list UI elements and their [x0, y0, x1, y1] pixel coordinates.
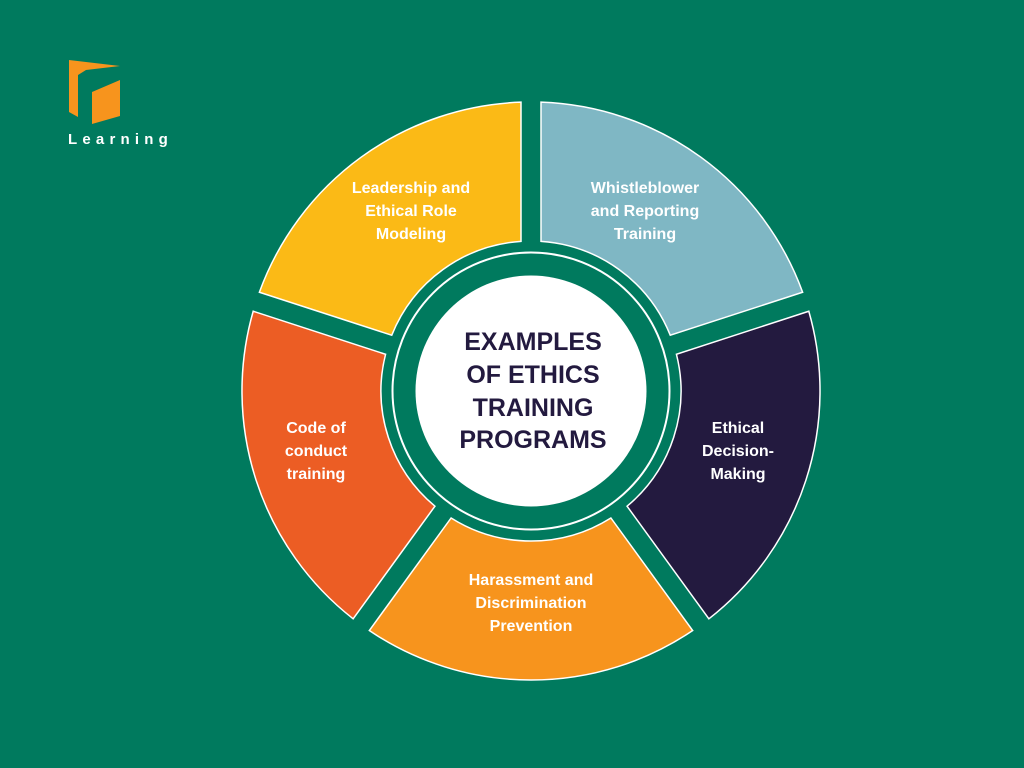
icon: F logo mark — [69, 60, 120, 124]
segment: ethical decision-making — [627, 311, 820, 619]
label: ethical decision-making: Making — [710, 466, 766, 483]
label: code of conduct: Code of — [286, 420, 346, 437]
label: leadership: Leadership and — [352, 180, 470, 197]
label: ethical decision-making: Decision- — [702, 443, 774, 460]
label: whistleblower: Training — [614, 226, 676, 243]
center title: TRAINING — [473, 394, 593, 422]
label: code of conduct — [285, 420, 348, 483]
label: code of conduct: conduct — [285, 443, 348, 460]
label: ethical decision-making — [702, 420, 774, 483]
segment: code of conduct — [242, 311, 435, 619]
logo — [68, 60, 173, 148]
label: code of conduct: training — [287, 466, 345, 483]
label: harassment: Harassment and — [469, 572, 593, 589]
segment: whistleblower — [541, 102, 803, 335]
center title — [459, 328, 607, 454]
logo text: Learning — [68, 131, 173, 148]
segment: harassment — [369, 518, 693, 680]
label: ethical decision-making: Ethical — [712, 420, 764, 437]
label: whistleblower — [591, 180, 699, 243]
center title: PROGRAMS — [459, 426, 607, 454]
center circle — [416, 276, 646, 506]
center title: EXAMPLES — [464, 328, 602, 356]
label: leadership — [352, 180, 470, 243]
label: harassment: Discrimination — [475, 595, 587, 612]
wheel diagram — [242, 102, 820, 680]
center title: OF ETHICS — [466, 361, 600, 389]
inner ring outline — [392, 252, 670, 530]
label: leadership: Modeling — [376, 226, 446, 243]
label: whistleblower: Whistleblower — [591, 180, 699, 197]
label: harassment — [469, 572, 593, 635]
segment: leadership — [259, 102, 521, 335]
label: leadership: Ethical Role — [365, 203, 457, 220]
label: harassment: Prevention — [490, 618, 572, 635]
label: whistleblower: and Reporting — [591, 203, 699, 220]
